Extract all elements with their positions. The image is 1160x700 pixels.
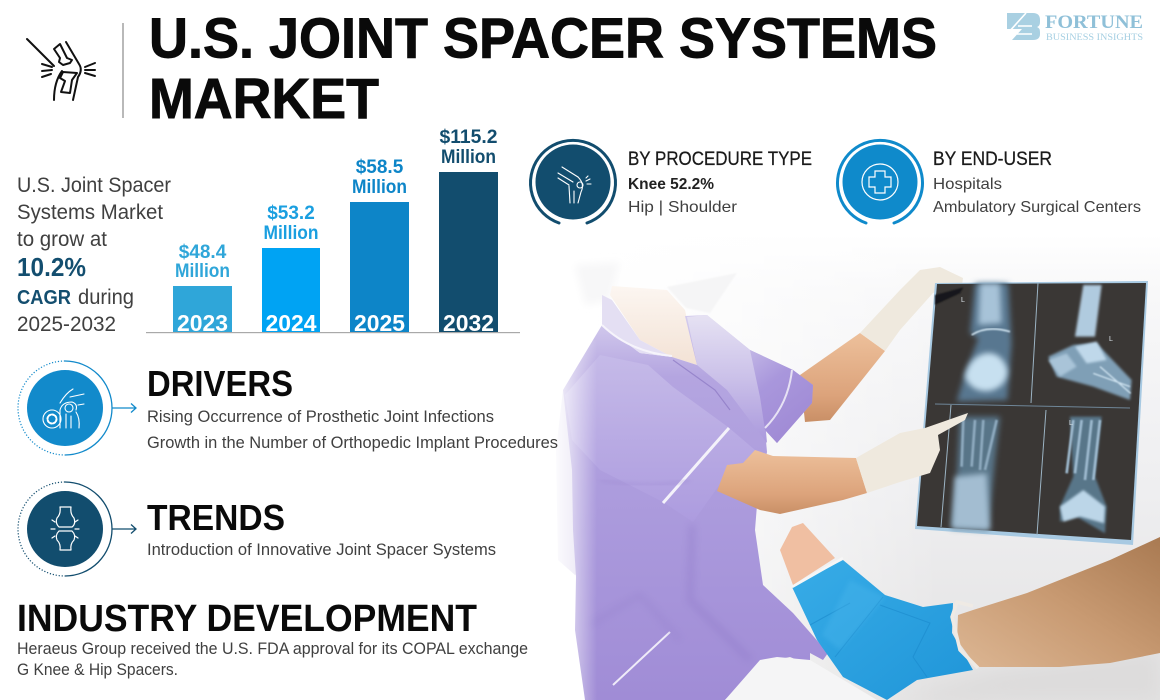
- by end-user text: Hospitals: [933, 176, 1002, 193]
- industry development text: G Knee & Hip Spacers.: [17, 660, 178, 679]
- CAGR text block: U.S. Joint Spacer: [17, 174, 171, 197]
- icon: drivers with arrow: [18, 361, 136, 455]
- trends text: TRENDS: [147, 497, 285, 538]
- CAGR text block: 10.2%: [17, 252, 86, 282]
- CAGR text block: during: [78, 286, 134, 309]
- logo: Fortune Business Insights: FORTUNE: [1045, 12, 1143, 33]
- bone: ankle side view: [1048, 285, 1132, 400]
- x-ray film: [915, 281, 1148, 545]
- bar 2024: [262, 203, 320, 336]
- chest panel: [687, 315, 767, 443]
- by procedure type text: Knee 52.2%: [628, 176, 714, 193]
- bar 2024: $53.2: [267, 203, 315, 224]
- forearm: [717, 450, 867, 514]
- by procedure type text: BY PROCEDURE TYPE: [628, 149, 812, 170]
- icon: procedure type knee: [530, 140, 616, 223]
- icon: end-user hospital cross: [838, 140, 922, 223]
- white trousers: [725, 657, 877, 700]
- nurse neck, mask and cap: [575, 262, 737, 365]
- title: MARKET: [149, 67, 379, 130]
- by end-user text: [933, 149, 1141, 216]
- x-ray film: L: [961, 297, 965, 304]
- near sleeve: [565, 355, 755, 522]
- piping: [663, 428, 729, 503]
- bone: ankle front view: [957, 283, 1012, 402]
- wall shadow under leg: [900, 650, 1160, 700]
- header divider: [122, 23, 124, 118]
- bar chart: market size by year: [146, 127, 520, 336]
- header icon: knee joint: [27, 39, 95, 100]
- industry development text: INDUSTRY DEVELOPMENT: [17, 598, 477, 640]
- x-ray film: L: [1069, 420, 1073, 427]
- bar 2025: Million: [352, 177, 407, 198]
- patient foot: [780, 523, 835, 585]
- drivers text: Rising Occurrence of Prosthetic Joint Infections: [147, 407, 494, 426]
- logo: Fortune Business Insights: [1007, 12, 1143, 43]
- nurse forearm and tunic: [556, 295, 867, 700]
- bar 2025: [350, 157, 409, 336]
- x-ray film: L: [1109, 336, 1113, 343]
- nurse upper arm: [800, 333, 885, 422]
- industry development text: [17, 598, 528, 679]
- drivers text: Growth in the Number of Orthopedic Implant Procedures: [147, 433, 558, 452]
- bar 2032: 2032: [443, 310, 494, 336]
- CAGR text block: to grow at: [17, 228, 107, 251]
- logo: Fortune Business Insights: BUSINESS INSIGHTS: [1046, 33, 1143, 43]
- trends text: [147, 497, 496, 559]
- tunic body: [563, 315, 828, 700]
- by end-user text: BY END-USER: [933, 149, 1052, 170]
- left edge fade on nurse: [555, 340, 597, 700]
- by procedure type text: [628, 149, 812, 216]
- bar 2032: $115.2: [440, 127, 498, 148]
- drivers text: [147, 363, 558, 452]
- bar 2023: 2023: [177, 310, 228, 336]
- back flap: [556, 390, 600, 575]
- trends text: Introduction of Innovative Joint Spacer Systems: [147, 540, 496, 559]
- bar 2032: Million: [441, 147, 496, 168]
- lower glove: [856, 413, 968, 493]
- industry development text: Heraeus Group received the U.S. FDA approval for its COPAL exchange: [17, 639, 528, 658]
- by procedure type text: Hip | Shoulder: [628, 199, 738, 216]
- collar: [602, 295, 672, 357]
- bone: foot top view: [952, 417, 1000, 530]
- bar 2024: Million: [264, 223, 318, 244]
- bar 2025: 2025: [354, 310, 405, 336]
- bar 2024: 2024: [266, 310, 317, 336]
- bar 2023: Million: [175, 261, 230, 282]
- far sleeve: [750, 350, 813, 443]
- CAGR text block: [17, 174, 171, 336]
- CAGR text block: Systems Market: [17, 201, 163, 224]
- CAGR text block: 2025-2032: [17, 313, 116, 336]
- blue cast: [792, 558, 978, 700]
- icon: trends with arrow: [18, 482, 136, 576]
- title: U.S. JOINT SPACER SYSTEMS: [149, 6, 937, 70]
- bar 2025: $58.5: [356, 157, 404, 178]
- upper glove: [860, 267, 963, 351]
- photo: nurse examining foot x-ray with patient in blue cast: [500, 235, 1160, 700]
- bar 2023: $48.4: [179, 242, 227, 263]
- by end-user text: Ambulatory Surgical Centers: [933, 199, 1141, 216]
- bone: foot oblique view: [1060, 417, 1107, 533]
- bar 2032: [439, 127, 498, 336]
- patient leg: [957, 537, 1160, 667]
- fold shadows: [673, 360, 730, 410]
- title: [149, 6, 937, 130]
- bar 2023: [173, 242, 232, 336]
- drivers text: DRIVERS: [147, 363, 293, 404]
- CAGR text block: CAGR: [17, 287, 72, 309]
